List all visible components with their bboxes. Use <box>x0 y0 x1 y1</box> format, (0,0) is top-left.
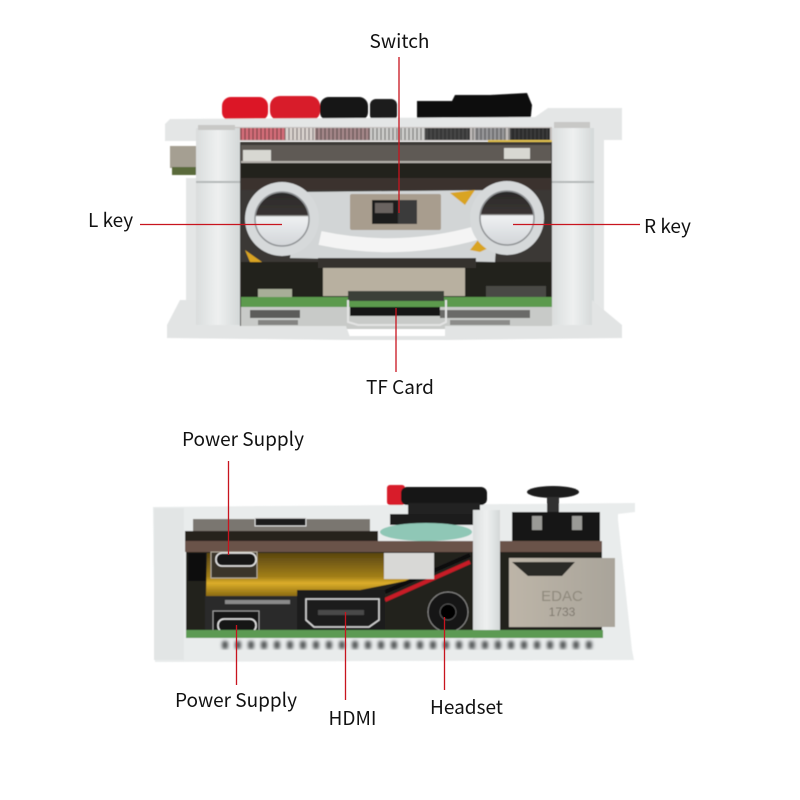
line: upper power supply <box>228 461 230 555</box>
label: Power Supply bottom: Power Supply <box>175 686 297 713</box>
TF card slot <box>348 291 446 325</box>
line: switch <box>398 57 400 213</box>
upper power port <box>211 552 257 578</box>
acrylic top plate <box>165 108 622 142</box>
side wall <box>154 508 184 660</box>
label: Headset: Headset <box>430 693 503 720</box>
line: lower power supply <box>236 625 238 685</box>
red and black buttons <box>222 93 532 125</box>
screen module <box>185 518 378 543</box>
under-board parts <box>218 639 598 649</box>
standoff pillar <box>473 510 500 650</box>
R key <box>470 181 544 255</box>
USB connector at side <box>170 146 198 175</box>
acrylic bottom plate <box>167 300 622 340</box>
buttons <box>387 485 487 525</box>
line: TF card <box>395 308 397 372</box>
line: HDMI <box>344 612 346 700</box>
acrylic case <box>153 503 635 662</box>
switch <box>350 194 441 230</box>
label: L key: L key <box>88 206 133 233</box>
ethernet port: 1733 <box>549 605 576 619</box>
white connector <box>384 553 434 579</box>
joystick <box>527 486 579 513</box>
battery wrap <box>290 190 500 262</box>
left pillar <box>186 125 240 336</box>
L key <box>245 182 319 256</box>
right pillar <box>552 122 604 336</box>
green PCB <box>186 630 603 638</box>
photo: console front view <box>165 93 622 340</box>
ethernet port: EDAC <box>541 588 583 605</box>
callout lines <box>140 57 640 700</box>
lower power port <box>213 611 259 632</box>
lower board area <box>241 258 552 329</box>
interior <box>186 552 602 630</box>
upper brown board <box>185 541 602 552</box>
side component <box>188 553 206 581</box>
line: R key <box>513 224 640 226</box>
screen module <box>241 145 551 190</box>
line: headset <box>444 617 446 690</box>
interior <box>240 142 552 328</box>
battery <box>206 553 420 596</box>
label: Switch: Switch <box>370 27 429 54</box>
lower left components <box>205 596 297 630</box>
HDMI port <box>297 590 385 631</box>
teal part <box>380 523 472 541</box>
label: TF Card: TF Card <box>366 373 434 400</box>
wires <box>385 562 470 600</box>
headset jack <box>428 592 468 632</box>
photo: console side view <box>153 485 635 662</box>
heatsink <box>512 512 600 541</box>
line: L key <box>140 224 282 226</box>
label: Power Supply top: Power Supply <box>182 425 304 452</box>
label: HDMI: HDMI <box>329 704 376 731</box>
ethernet port <box>509 558 615 627</box>
label: R key: R key <box>644 212 691 239</box>
